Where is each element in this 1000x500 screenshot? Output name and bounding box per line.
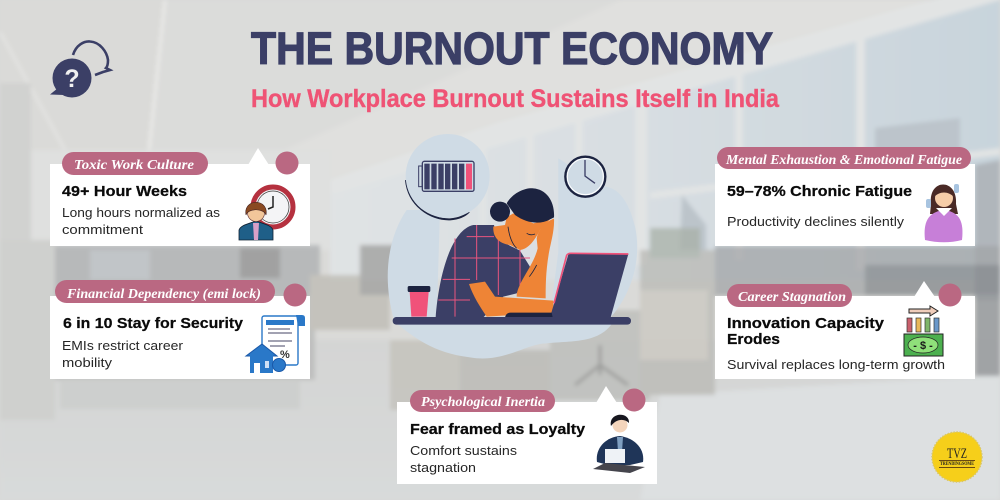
pill label [55, 280, 275, 303]
description: stagnation [410, 461, 476, 475]
icon: tired woman [925, 184, 962, 242]
desk [393, 317, 631, 325]
pill label [410, 390, 555, 412]
description [62, 206, 220, 237]
card: toxic work culture [50, 148, 310, 246]
description: Long hours normalized as [62, 206, 220, 220]
title: THE BURNOUT ECONOMY [251, 23, 773, 74]
icon: loan document and house: % [280, 349, 290, 361]
pill label: Financial Dependency (emi lock) [66, 287, 261, 302]
pill label [62, 152, 208, 175]
icon: question speech bubbles: ? [64, 65, 80, 93]
stat heading: 59–78% Chronic Fatigue [727, 183, 912, 200]
coffee cup [408, 286, 430, 317]
description: Productivity declines silently [727, 215, 905, 229]
icon: man with paperwork [593, 415, 645, 473]
stat heading: 49+ Hour Weeks [62, 183, 187, 200]
pill label: Mental Exhaustion & Emotional Fatigue [725, 153, 962, 168]
description: commitment [62, 223, 144, 237]
person [436, 188, 554, 317]
icon: wall clock [565, 157, 605, 197]
description: mobility [62, 356, 113, 370]
card: financial dependency [50, 280, 310, 379]
interior band [55, 228, 1000, 410]
stat heading: 6 in 10 Stay for Security [63, 315, 244, 332]
stat heading [727, 315, 885, 348]
central illustration: burned out worker [388, 134, 637, 358]
logo: TVZ badge: TVZ [947, 446, 967, 462]
description [62, 339, 183, 370]
card: psychological inertia [397, 386, 657, 484]
card: mental exhaustion [715, 147, 975, 246]
floor [0, 340, 1000, 500]
icon: question speech bubbles [50, 41, 110, 98]
logo: TVZ badge: TRENDINGSOME [940, 462, 975, 467]
pill label: Career Stagnation [738, 290, 846, 305]
description: Comfort sustains [410, 444, 517, 458]
description [410, 444, 517, 475]
stat heading: Fear framed as Loyalty [410, 421, 586, 438]
laptop [505, 253, 628, 317]
left wall [0, 83, 31, 383]
pill label: Psychological Inertia [421, 395, 545, 410]
icon: money and bars: - $ - [913, 340, 933, 352]
pill label [717, 147, 971, 169]
icon: clock and worker [239, 187, 293, 240]
pill label: Toxic Work Culture [74, 158, 194, 173]
description: Survival replaces long-term growth [727, 358, 945, 372]
icon: low battery [406, 134, 490, 219]
logo: TVZ badge [932, 432, 982, 482]
icon: loan document and house [246, 315, 305, 373]
icon: money and bars [904, 306, 943, 356]
stat heading: Erodes [727, 331, 780, 348]
windows [330, 0, 1000, 300]
stat heading: Innovation Capacity [727, 315, 885, 332]
blob background [388, 158, 637, 358]
ceiling panels [0, 0, 967, 190]
pill label [727, 284, 852, 307]
card: career stagnation [715, 281, 975, 379]
description: EMIs restrict career [62, 339, 183, 353]
subtitle: How Workplace Burnout Sustains Itself in India [251, 85, 780, 113]
